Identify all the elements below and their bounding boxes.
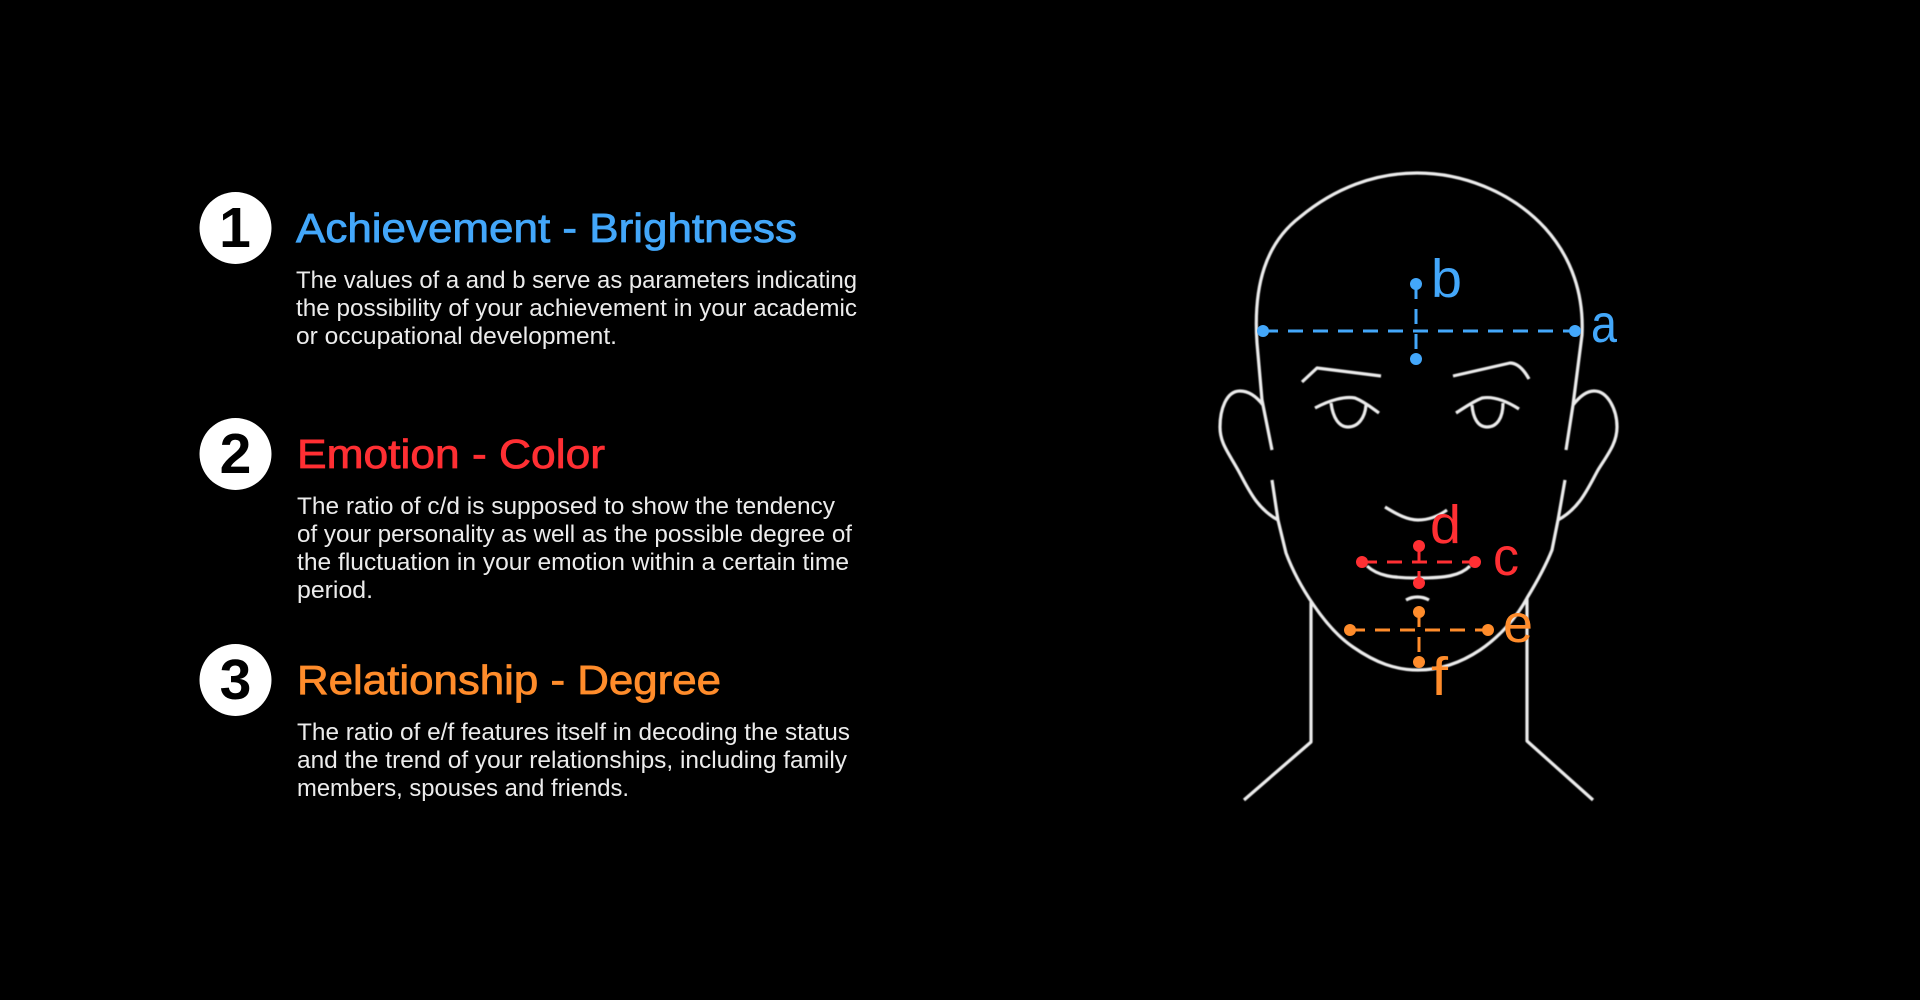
text block: achievement description: The values of a and b serve as parameters indicating [296,267,857,294]
orange measures e and f [1344,594,1533,707]
text block: achievement description: the possibility of your achievement in your academic [296,295,857,322]
section 3: relationship [200,644,850,802]
text block: emotion description: period. [297,577,373,604]
section 1: achievement [200,192,857,350]
text block: relationship description: members, spouses and friends. [297,775,629,802]
heading: Emotion - Color: Emotion - Color [297,431,605,477]
text block: emotion description: The ratio of c/d is supposed to show the tendency [297,493,835,520]
heading: Relationship - Degree: Relationship - Degree [297,657,721,703]
text block: emotion description: the fluctuation in your emotion within a certain time [297,549,849,576]
label f: f [1431,647,1449,707]
text block: relationship description: The ratio of e/f features itself in decoding the status [297,719,850,746]
number badge 2 [200,418,272,490]
text block: emotion description: of your personality as well as the possible degree of [297,521,852,548]
number badge 3: 3 [220,648,251,712]
section 2: emotion [200,418,852,604]
nose, mouth and chin [1367,507,1470,600]
number badge 1: 1 [219,196,251,260]
head outline [1220,173,1617,800]
number badge 1 [200,192,272,264]
face diagram [1220,173,1618,800]
label b: b [1431,249,1462,309]
blue measures a and b [1257,249,1618,365]
number badge 3 [200,644,272,716]
text block: emotion description [297,493,852,604]
text block: relationship description: and the trend of your relationships, including family [297,747,847,774]
text block: achievement description: or occupational development. [296,323,617,350]
label a: a [1591,294,1618,354]
label d: d [1430,495,1461,555]
label c: c [1493,527,1519,587]
text block: relationship description [297,719,850,802]
number badge 2: 2 [220,422,251,486]
text block: achievement description [296,267,857,350]
red measures c and d [1356,495,1519,589]
heading: Achievement - Brightness: Achievement - Brightness [296,205,797,251]
eyebrows and eyes [1302,363,1529,427]
label e: e [1503,594,1533,654]
